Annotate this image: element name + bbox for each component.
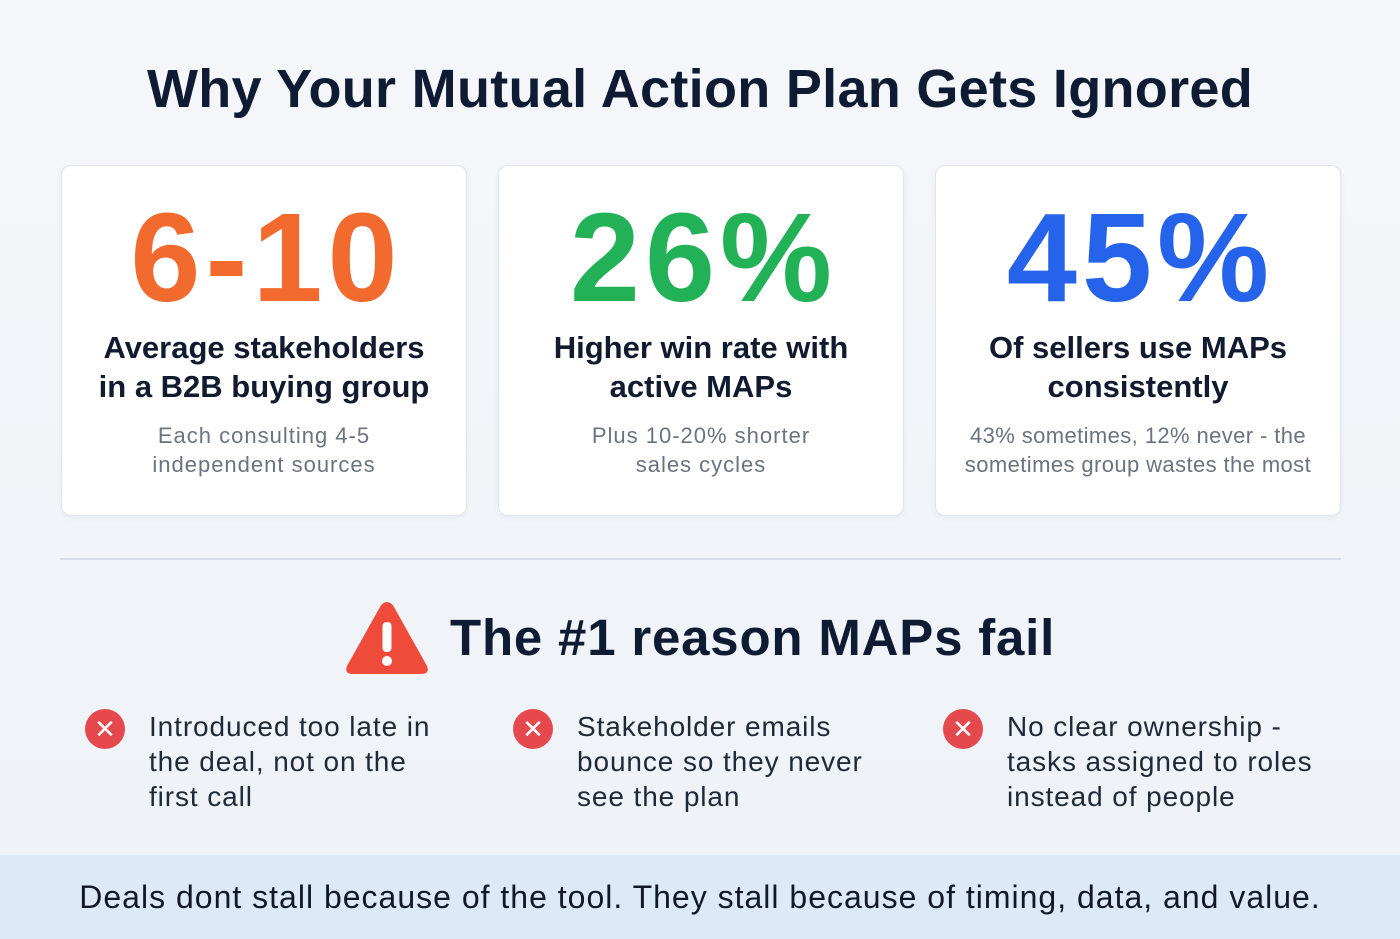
stat: 6-10: Each consulting 4-5 xyxy=(158,423,370,448)
reason 1 xyxy=(85,709,430,812)
reason 1: the deal, not on the xyxy=(149,746,407,777)
stat: 45% xyxy=(965,187,1311,477)
stat: 45%: Of sellers use MAPs xyxy=(989,330,1287,365)
panel: win rate xyxy=(498,165,904,516)
reason 3: instead of people xyxy=(1007,781,1236,812)
footer banner: Deals dont stall because of the tool. They stall because of timing, data, and value. xyxy=(79,879,1321,915)
stat: 26%: 26% xyxy=(570,187,837,328)
stat: 45%: 43% sometimes, 12% never - the xyxy=(970,423,1306,448)
heading: reason: The #1 reason MAPs fail xyxy=(450,609,1055,666)
reason 1: first call xyxy=(149,781,253,812)
stat: 6-10: 6-10 xyxy=(130,187,403,328)
stat: 6-10: Average stakeholders xyxy=(103,330,425,365)
stat: 45%: 45% xyxy=(1007,187,1274,328)
reason 2: ✕ xyxy=(522,714,544,744)
reason 1: Introduced too late in xyxy=(149,711,430,742)
reason 3: tasks assigned to roles xyxy=(1007,746,1313,777)
stat: 6-10: independent sources xyxy=(152,452,376,477)
reason 2: see the plan xyxy=(577,781,740,812)
stat: 45%: consistently xyxy=(1048,369,1228,404)
stat: 26% xyxy=(554,187,848,477)
stat: 26%: Higher win rate with xyxy=(554,330,848,365)
reason 2 xyxy=(513,709,863,812)
reason 3: No clear ownership - xyxy=(1007,711,1282,742)
stat: 26%: active MAPs xyxy=(610,369,792,404)
stat: 45%: sometimes group wastes the most xyxy=(965,452,1311,477)
title: Why Your Mutual Action Plan Gets Ignored xyxy=(147,59,1253,119)
reason 3 xyxy=(943,709,1313,812)
stat: 26%: Plus 10-20% shorter xyxy=(592,423,810,448)
panel: stakeholders xyxy=(61,165,467,516)
panel: sellers xyxy=(935,165,1341,516)
stat: 26%: sales cycles xyxy=(636,452,766,477)
stat: 6-10: in a B2B buying group xyxy=(99,369,429,404)
footer banner xyxy=(0,855,1400,939)
stat: 6-10 xyxy=(99,187,429,477)
reason 1: ✕ xyxy=(94,714,116,744)
reason 2: bounce so they never xyxy=(577,746,863,777)
reason 3: ✕ xyxy=(952,714,974,744)
icon: warning triangle xyxy=(346,602,428,674)
reason 2: Stakeholder emails xyxy=(577,711,831,742)
